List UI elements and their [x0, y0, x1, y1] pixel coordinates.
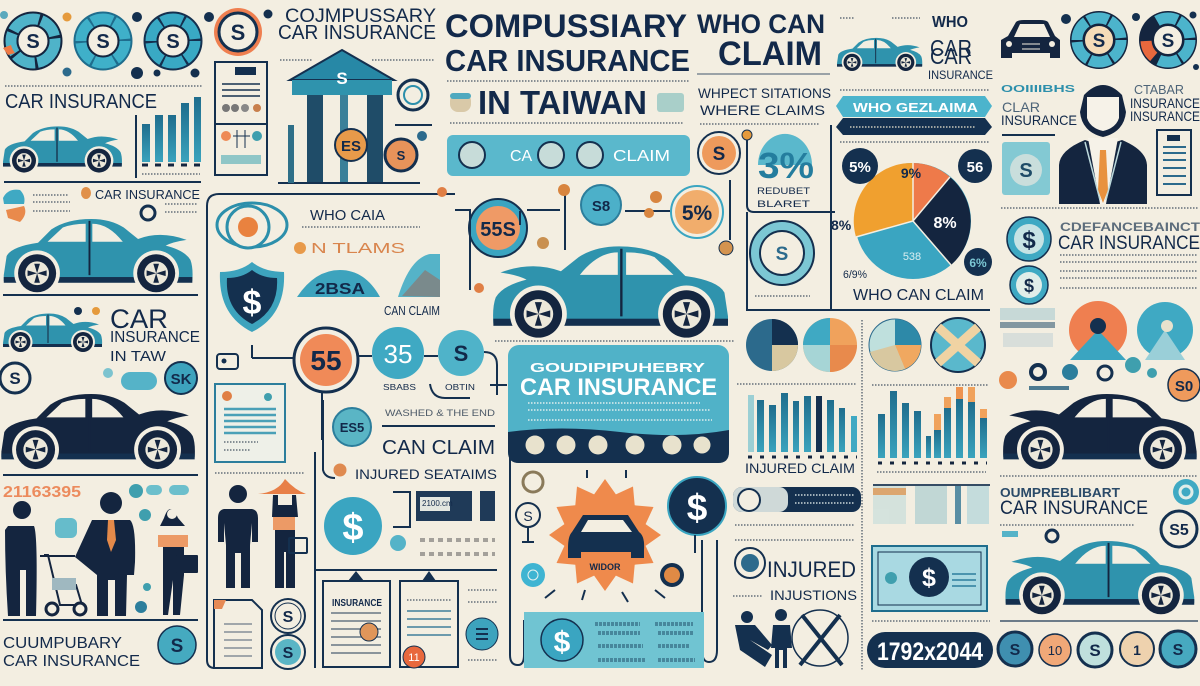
teal square seal: S	[1019, 160, 1033, 182]
pie chart: 538	[903, 251, 921, 263]
small dots	[74, 307, 100, 315]
top right teal car	[837, 38, 922, 73]
main title: IN TAIWAN	[478, 84, 647, 121]
who can claim label: WHO CAN CLAIM	[853, 287, 984, 304]
side coin	[466, 590, 498, 660]
heading car insurance right: CLAR	[1002, 99, 1040, 115]
big teal car left	[4, 219, 193, 296]
coin icons	[271, 599, 305, 669]
heading car insurance in taiwan small	[110, 304, 200, 365]
car insurance stacked: CAR	[930, 43, 972, 69]
which situations	[698, 85, 831, 124]
heading car insurance in taiwan small: INSURANCE	[110, 329, 200, 346]
bar chart left	[136, 97, 201, 178]
teal banner	[447, 135, 690, 176]
teal bottom panel: $	[554, 626, 571, 659]
orange S0 coin: S0	[1175, 378, 1193, 395]
coin 55 teal	[333, 408, 371, 446]
icons right bottom: S5	[1169, 522, 1189, 539]
heading: compulsory car insurance	[278, 6, 436, 44]
title side icons	[450, 93, 684, 112]
circle S: S	[454, 341, 468, 366]
coins bottom row	[998, 631, 1196, 667]
pie chart: 9%	[901, 165, 922, 181]
label who caia: WHO CAIA	[310, 208, 385, 224]
teal circle: S8	[592, 198, 610, 215]
coin icons: S	[283, 645, 294, 662]
circle 35: 35	[384, 339, 412, 369]
coins bottom row: 10	[1048, 643, 1062, 658]
clipboard two: 11	[408, 652, 420, 664]
heading right bottom	[1000, 486, 1148, 525]
circle 55S	[469, 199, 527, 257]
dome with number: 2BSA	[315, 281, 366, 298]
person standing	[218, 485, 258, 588]
connector nodes	[437, 184, 733, 293]
pies row	[746, 318, 985, 372]
teal report card	[215, 384, 285, 462]
sunburst crash icon	[523, 470, 665, 602]
injured claim: INJURED CLAIM	[745, 460, 855, 476]
central car	[493, 246, 728, 342]
circle 35	[372, 327, 424, 379]
pie chart: 8%	[933, 215, 957, 232]
clipboard insurance	[323, 571, 390, 667]
icon: orange coin: S	[231, 20, 245, 45]
black car right	[1003, 394, 1197, 473]
heading compulsory bottom left	[3, 635, 140, 670]
injured seataims: INJURED SEATAIMS	[355, 466, 497, 482]
document page	[214, 600, 262, 668]
circle 5 percent: 5%	[682, 202, 712, 225]
teal bottom panel	[524, 612, 704, 668]
donut icons top left	[0, 11, 202, 79]
car insurance stacked: WHO	[932, 14, 968, 31]
pie labels: 5%	[849, 159, 871, 176]
donut icons top left: S	[26, 31, 40, 53]
heading right bottom: CAR INSURANCE	[1000, 498, 1148, 519]
coins row	[0, 362, 197, 394]
left row heading with blobs	[3, 187, 200, 222]
document panel	[215, 62, 267, 175]
injured heading: INJURED	[767, 557, 856, 582]
coins bottom row: S	[1010, 642, 1021, 659]
teal square seal	[1002, 142, 1050, 195]
circle 55	[294, 328, 358, 392]
people with cart	[5, 492, 198, 616]
icon: shield dollar: $	[243, 284, 262, 322]
icon: shield dollar	[220, 262, 284, 332]
pie labels: 6%	[969, 256, 987, 270]
teal circle	[581, 185, 621, 225]
injured persons and cross	[735, 609, 848, 668]
injustions	[733, 587, 857, 603]
size pill	[867, 632, 993, 668]
injured heading	[735, 548, 856, 582]
photo strip	[873, 485, 990, 524]
icon: bank building with coins	[278, 50, 434, 183]
right heading car insurance: CDEFANCEBAINCT	[1060, 220, 1200, 234]
circle 55S: 55S	[480, 219, 516, 241]
pie labels: 8%	[831, 217, 852, 233]
teal banner: CLAIM	[613, 148, 670, 165]
circle 55: 55	[310, 345, 342, 376]
teal coin bottom left: S	[171, 636, 183, 657]
main title: CAR INSURANCE	[445, 43, 690, 78]
black car	[1, 394, 195, 473]
coin 55 teal: ES5	[340, 420, 364, 435]
right pies	[1069, 301, 1193, 360]
size pill: 1792x2044	[877, 638, 983, 666]
arrow banners	[836, 96, 992, 135]
car insurance stacked: INSURANCE	[928, 68, 993, 82]
who can claim title	[697, 9, 830, 74]
bar chart right	[872, 385, 988, 472]
heading: compulsory car insurance: CAR INSURANCE	[278, 22, 436, 44]
heading right bottom: OUMPREBLIBART	[1000, 486, 1120, 500]
coins row: SK	[171, 371, 192, 388]
can claim label: CAN CLAIM	[384, 303, 440, 318]
pie chart	[854, 163, 971, 279]
car front black icon	[1001, 20, 1060, 58]
woman with orange hat	[258, 479, 307, 588]
small labels: SBABS	[383, 383, 416, 392]
pin S: S	[523, 508, 533, 524]
dollar circle: $	[342, 507, 364, 549]
heading compulsory bottom left: CAR INSURANCE	[3, 653, 140, 670]
coin S orange: S	[713, 144, 725, 165]
heading: compulsory car insurance: COJMPUSSARY	[285, 6, 436, 27]
target coin: S	[776, 244, 788, 265]
pie labels	[831, 148, 992, 281]
icon: bank building with coins: S	[397, 148, 406, 163]
car insurance stacked: CAR	[930, 35, 972, 61]
who can claim title: WHO CAN	[697, 9, 825, 39]
screen panel: 2100.cm	[422, 499, 453, 508]
coin icons: S	[283, 609, 294, 626]
pin dollar	[668, 477, 726, 553]
clipboard insurance: INSURANCE	[332, 598, 382, 609]
teal car right	[1005, 541, 1194, 618]
which situations: WHPECT SITATIONS	[698, 85, 831, 101]
left row heading with blobs: CAR INSURANCE	[95, 188, 200, 202]
teal coin bottom left	[158, 626, 196, 664]
heading car insurance right: OOIIIIBHS	[1001, 84, 1075, 95]
small washed label: WASHED & THE END	[385, 408, 496, 418]
small labels: OBTIN	[445, 383, 475, 392]
coins bottom row: 1	[1133, 642, 1141, 658]
heading car insurance right: INSURANCE	[1001, 112, 1077, 128]
agent in suit	[1059, 85, 1147, 204]
screen panel	[390, 491, 495, 554]
donuts top right: S	[1093, 31, 1105, 52]
label who caia	[302, 208, 420, 227]
navy pill	[733, 487, 861, 512]
sunburst crash icon: WIDOR	[590, 562, 621, 572]
coins dollar	[1007, 217, 1051, 304]
icon: target coin	[217, 203, 287, 248]
right small blurred table	[1000, 308, 1055, 347]
coins bottom row: S	[1089, 641, 1101, 660]
frame 3 percent: REDUBET	[757, 186, 811, 196]
main title: COMPUSSIARY	[445, 8, 687, 44]
orange label	[294, 240, 405, 257]
teal car	[3, 126, 122, 175]
scattered teal icons	[55, 484, 189, 613]
dome map icon	[398, 254, 440, 297]
icon: bank building with coins: S	[336, 69, 348, 88]
small labels	[383, 383, 475, 392]
coins dollar: $	[1024, 276, 1034, 296]
coins row: S	[9, 369, 21, 388]
scatter icons row	[999, 357, 1157, 390]
which situations: WHERE CLAIMS	[700, 102, 825, 118]
heading compulsory bottom left: CUUMPUBARY	[3, 635, 122, 652]
pin dollar: $	[687, 487, 708, 528]
orange S0 coin	[1168, 369, 1200, 401]
center teal info panel: GOUDIPIPUHEBRY	[530, 360, 705, 375]
pie labels: 56	[967, 159, 983, 176]
connector lines	[252, 345, 497, 440]
icons right bottom	[1002, 479, 1199, 547]
who can claim title: CLAIM	[718, 35, 822, 73]
orange number: 21163395	[3, 484, 81, 501]
can claim heading: CAN CLAIM	[382, 437, 495, 459]
right heading car insurance	[1058, 220, 1200, 288]
icon: bank building with coins: ES	[341, 138, 361, 155]
donut icons top left: S	[96, 31, 110, 53]
heading car insurance right	[1001, 84, 1077, 135]
teal banner: CA	[510, 148, 533, 165]
target coin	[747, 212, 990, 310]
icon: orange coin	[204, 8, 272, 56]
bill dollar: $	[922, 564, 936, 592]
connectors center	[440, 180, 730, 290]
center teal info panel: CAR INSURANCE	[520, 374, 717, 401]
center teal info panel	[508, 345, 729, 463]
coin S orange	[698, 132, 740, 174]
heading: car insurance: CAR INSURANCE	[5, 91, 157, 113]
bill dollar	[872, 546, 987, 611]
heading car insurance in taiwan small: IN TAW	[110, 348, 167, 365]
main title	[445, 8, 690, 123]
coins dollar: $	[1022, 227, 1036, 254]
pin S	[516, 503, 540, 542]
bar chart middle	[737, 384, 857, 457]
injustions: INJUSTIONS	[770, 587, 857, 603]
pie labels: 6/9%	[843, 269, 867, 281]
frame 3 percent	[742, 130, 835, 212]
orange label: N TLAMS	[311, 240, 405, 257]
car insurance stacked	[840, 14, 993, 82]
coins bottom row: S	[1173, 642, 1184, 659]
small teal car	[3, 314, 102, 354]
clipboard two	[400, 571, 458, 668]
heading car insurance in taiwan small: CAR	[110, 304, 168, 334]
small washed label	[382, 408, 496, 426]
form document	[1157, 130, 1191, 195]
icon: lock tag	[217, 354, 238, 369]
donuts top right: S	[1162, 31, 1174, 52]
arrow banners: WHO GEZLAIMA	[853, 100, 979, 115]
donuts top right	[1061, 11, 1199, 70]
dollar circle	[324, 497, 382, 555]
frame 3 percent: 3%	[758, 145, 814, 186]
circle S	[438, 330, 484, 376]
heading insurance right edge: CTABAR	[1134, 82, 1184, 97]
small coins	[521, 563, 684, 587]
donut icons top left: S	[166, 31, 180, 53]
frame 3 percent: BLARET	[757, 199, 811, 209]
heading insurance right edge	[1130, 82, 1200, 124]
dome with number	[297, 270, 380, 298]
circle 5 percent	[671, 186, 723, 238]
panel frame: who can claim	[207, 194, 440, 668]
